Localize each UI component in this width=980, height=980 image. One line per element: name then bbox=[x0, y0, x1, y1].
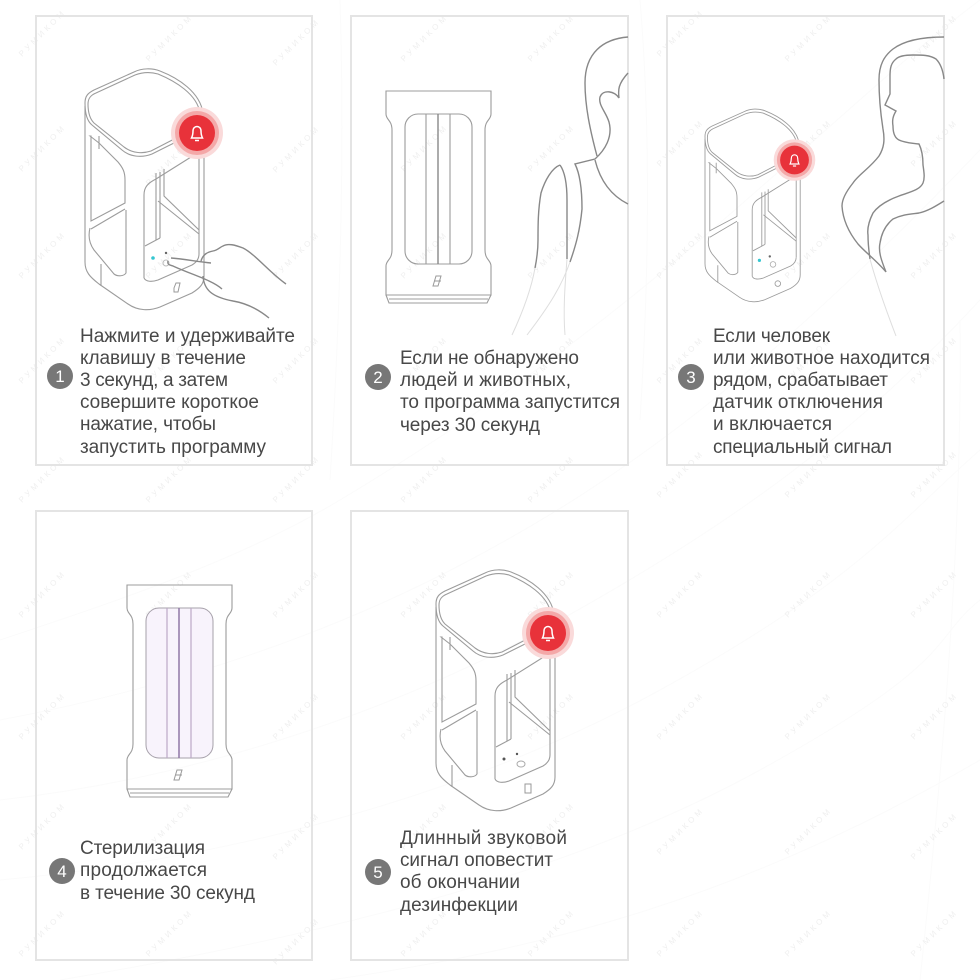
watermarks: РУМИКОМ bbox=[399, 692, 448, 741]
badge 3: 3 bbox=[686, 368, 696, 387]
watermarks: РУМИКОМ bbox=[144, 336, 193, 385]
badge 2 bbox=[365, 364, 391, 390]
text: step 3 bbox=[713, 326, 930, 458]
panel: step 3 bbox=[667, 16, 944, 465]
text: step 4 bbox=[80, 838, 255, 904]
watermarks: РУМИКОМ bbox=[271, 125, 320, 174]
watermarks: РУМИКОМ bbox=[655, 9, 704, 58]
figure: woman bbox=[842, 37, 944, 336]
watermarks: РУМИКОМ bbox=[655, 807, 704, 856]
watermarks: РУМИКОМ bbox=[144, 14, 193, 63]
badge 1 bbox=[47, 363, 73, 389]
watermarks: РУМИКОМ bbox=[526, 231, 575, 280]
badge 3 bbox=[678, 364, 704, 390]
badge 2: 2 bbox=[373, 368, 383, 387]
watermarks: РУМИКОМ bbox=[783, 450, 832, 499]
watermarks: РУМИКОМ bbox=[526, 336, 575, 385]
text: step 1: запустить программу bbox=[80, 437, 266, 458]
watermarks: РУМИКОМ bbox=[17, 802, 66, 851]
icon: alarm bell bbox=[171, 107, 223, 159]
text: step 2: Если не обнаружено bbox=[400, 348, 579, 369]
watermarks: РУМИКОМ bbox=[271, 231, 320, 280]
watermarks: РУМИКОМ bbox=[909, 231, 958, 280]
text: step 4: в течение 30 секунд bbox=[80, 883, 255, 904]
watermarks: РУМИКОМ bbox=[271, 812, 320, 861]
watermarks: РУМИКОМ bbox=[909, 909, 958, 958]
watermarks: РУМИКОМ bbox=[144, 802, 193, 851]
lamp bbox=[436, 570, 555, 811]
panel: step 1 bbox=[36, 16, 312, 465]
watermarks: РУМИКОМ bbox=[526, 14, 575, 63]
watermarks: РУМИКОМ bbox=[526, 455, 575, 504]
watermarks: РУМИКОМ bbox=[399, 231, 448, 280]
watermarks: РУМИКОМ bbox=[655, 909, 704, 958]
lamp front view bbox=[386, 91, 491, 303]
text: step 3: Если человек bbox=[713, 326, 831, 347]
watermarks: РУМИКОМ bbox=[909, 450, 958, 499]
watermarks: РУМИКОМ bbox=[909, 119, 958, 168]
watermarks: РУМИКОМ bbox=[655, 231, 704, 280]
text: step 1: 3 секунд, а затем bbox=[80, 370, 228, 391]
watermarks: РУМИКОМ bbox=[909, 692, 958, 741]
watermarks: РУМИКОМ bbox=[783, 909, 832, 958]
watermarks: РУМИКОМ bbox=[399, 570, 448, 619]
badge 5: 5 bbox=[373, 863, 383, 882]
watermarks: РУМИКОМ bbox=[271, 570, 320, 619]
watermarks: РУМИКОМ bbox=[783, 14, 832, 63]
watermarks: РУМИКОМ bbox=[399, 124, 448, 173]
watermarks: РУМИКОМ bbox=[909, 812, 958, 861]
panel: step 5 bbox=[351, 511, 628, 960]
watermarks: РУМИКОМ bbox=[783, 336, 832, 385]
watermarks: РУМИКОМ bbox=[655, 570, 704, 619]
text: step 2: через 30 секунд bbox=[400, 415, 540, 436]
watermarks: РУМИКОМ bbox=[271, 917, 320, 966]
text: step 3: или животное находится bbox=[713, 348, 930, 369]
watermarks: РУМИКОМ bbox=[783, 692, 832, 741]
text: step 1: нажатие, чтобы bbox=[80, 414, 216, 435]
watermarks: РУМИКОМ bbox=[783, 119, 832, 168]
watermarks: РУМИКОМ bbox=[17, 336, 66, 385]
watermarks: РУМИКОМ bbox=[526, 124, 575, 173]
watermarks: РУМИКОМ bbox=[909, 570, 958, 619]
watermarks: РУМИКОМ bbox=[526, 692, 575, 741]
panel: step 4 bbox=[36, 511, 312, 960]
text: step 4: Стерилизация bbox=[80, 838, 205, 859]
watermarks: РУМИКОМ bbox=[399, 14, 448, 63]
icon: alarm bell bbox=[774, 139, 815, 181]
watermarks: РУМИКОМ bbox=[655, 336, 704, 385]
text: step 1: клавишу в течение bbox=[80, 348, 246, 369]
watermarks: РУМИКОМ bbox=[526, 570, 575, 619]
text: step 2 bbox=[400, 348, 620, 436]
text: step 3: и включается bbox=[713, 414, 832, 435]
watermarks: РУМИКОМ bbox=[17, 692, 66, 741]
lamp bbox=[705, 109, 800, 302]
badge 5 bbox=[365, 859, 391, 885]
text: step 1: Нажмите и удерживайте bbox=[80, 326, 295, 347]
watermarks: РУМИКОМ bbox=[271, 336, 320, 385]
icon: hand bbox=[168, 245, 286, 318]
figure: man from behind bbox=[512, 37, 628, 335]
text: step 5: сигнал оповестит bbox=[400, 850, 553, 871]
watermarks: РУМИКОМ bbox=[144, 570, 193, 619]
watermarks: РУМИКОМ bbox=[144, 138, 193, 187]
lamp front view sterilizing bbox=[127, 585, 232, 797]
watermarks: РУМИКОМ bbox=[17, 124, 66, 173]
badge 4: 4 bbox=[57, 862, 67, 881]
text: step 2: то программа запустится bbox=[400, 392, 620, 413]
lamp with finger pressing bbox=[85, 69, 204, 310]
text: step 1 bbox=[80, 326, 295, 458]
watermarks: РУМИКОМ bbox=[655, 450, 704, 499]
watermarks: РУМИКОМ bbox=[144, 909, 193, 958]
watermarks: РУМИКОМ bbox=[526, 802, 575, 851]
watermarks: РУМИКОМ bbox=[783, 231, 832, 280]
text: step 4: продолжается bbox=[80, 860, 207, 881]
watermarks: РУМИКОМ bbox=[655, 692, 704, 741]
watermarks: РУМИКОМ bbox=[144, 455, 193, 504]
watermarks: РУМИКОМ bbox=[17, 231, 66, 280]
panel: step 2 bbox=[351, 16, 628, 465]
badge 1: 1 bbox=[55, 367, 65, 386]
watermarks: РУМИКОМ bbox=[783, 570, 832, 619]
watermarks: РУМИКОМ bbox=[271, 18, 320, 67]
watermarks: РУМИКОМ bbox=[909, 14, 958, 63]
text: step 5: об окончании bbox=[400, 872, 520, 893]
watermarks: РУМИКОМ bbox=[17, 455, 66, 504]
text: step 3: специальный сигнал bbox=[713, 437, 892, 458]
badge 4 bbox=[49, 858, 75, 884]
watermarks: РУМИКОМ bbox=[526, 909, 575, 958]
watermarks: РУМИКОМ bbox=[17, 9, 66, 58]
text: step 3: рядом, срабатывает bbox=[713, 370, 888, 391]
watermarks: РУМИКОМ bbox=[399, 909, 448, 958]
watermarks: РУМИКОМ bbox=[144, 692, 193, 741]
watermarks: РУМИКОМ bbox=[271, 692, 320, 741]
watermarks: РУМИКОМ bbox=[655, 119, 704, 168]
watermarks: РУМИКОМ bbox=[399, 455, 448, 504]
text: step 5 bbox=[400, 828, 567, 916]
text: step 5: Длинный звуковой bbox=[400, 828, 567, 849]
watermarks: РУМИКОМ bbox=[909, 336, 958, 385]
watermarks: РУМИКОМ bbox=[17, 909, 66, 958]
text: step 2: людей и животных, bbox=[400, 370, 571, 391]
text: step 3: датчик отключения bbox=[713, 392, 883, 413]
watermarks: РУМИКОМ bbox=[783, 807, 832, 856]
watermarks: РУМИКОМ bbox=[271, 455, 320, 504]
icon: alarm bell bbox=[522, 607, 574, 659]
text: step 1: совершите короткое bbox=[80, 392, 259, 413]
text: step 5: дезинфекции bbox=[400, 895, 518, 916]
watermarks: РУМИКОМ bbox=[17, 570, 66, 619]
watermarks: РУМИКОМ bbox=[144, 231, 193, 280]
watermarks: РУМИКОМ bbox=[399, 802, 448, 851]
watermarks: РУМИКОМ bbox=[399, 336, 448, 385]
